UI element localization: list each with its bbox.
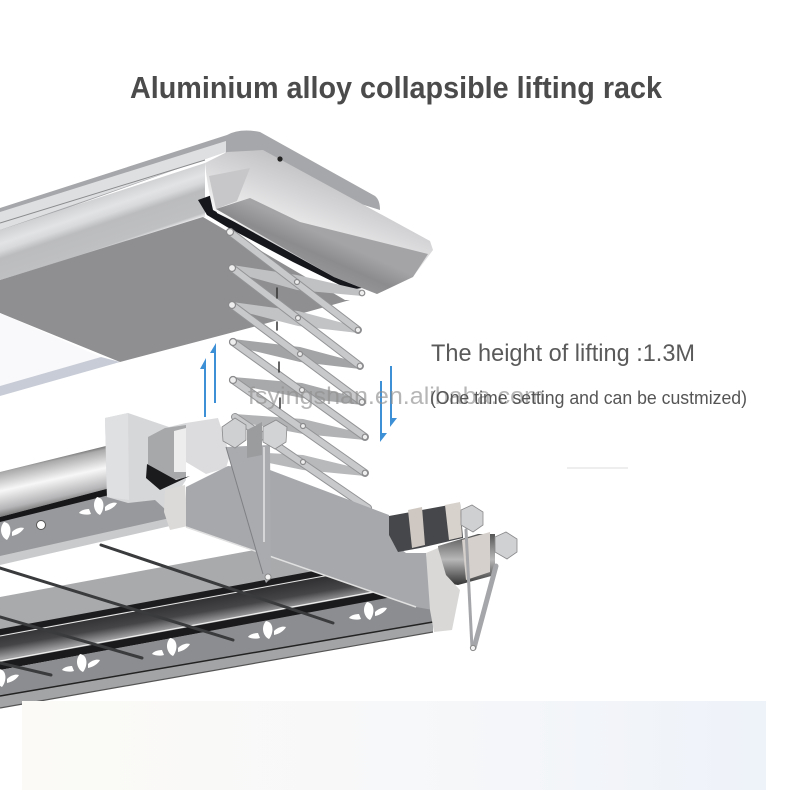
inner cable segments: [277, 288, 280, 408]
cross wires: [0, 545, 333, 675]
rear rail flowers and hole: [79, 497, 117, 515]
steep arms: [230, 232, 368, 508]
front perforated panel: [0, 590, 433, 696]
lower drying rack: [0, 413, 517, 708]
down arrows: [380, 366, 397, 442]
watermark: fsyingshan.en.alibaba.com: [248, 383, 545, 410]
rear dark channel: [0, 476, 170, 524]
collar: [186, 418, 230, 474]
black slot: [198, 195, 362, 290]
right upper tube: [389, 503, 463, 552]
bottom pale band: [22, 701, 766, 790]
scissor lifting arms: [226, 228, 368, 508]
light panel: [0, 313, 101, 386]
end cap: [205, 150, 433, 294]
arm pivots: [226, 228, 368, 476]
cap sensor dot: [277, 156, 283, 162]
upper ceiling unit: [0, 131, 433, 396]
rear perforated rail: [0, 480, 170, 563]
flat arms: [232, 265, 365, 476]
lifting height label: The height of lifting :1.3M: [431, 340, 695, 367]
cap lower face: [216, 198, 428, 294]
plate end foot: [164, 485, 188, 530]
right hex bolts: [461, 505, 483, 532]
main cross plate: [186, 466, 433, 610]
left hex bolts: [222, 418, 246, 448]
right end foot: [426, 548, 460, 632]
mid panel: [0, 523, 400, 631]
dark channel: [0, 557, 400, 664]
grey underside panel: [0, 217, 350, 362]
lifting note: (One time setting and can be custmized): [430, 388, 747, 408]
right V pendant: [466, 530, 496, 651]
up arrows: [200, 343, 216, 417]
front flowers: [349, 602, 387, 620]
right lower tube: [438, 534, 495, 585]
left pendant hook: [226, 445, 271, 583]
left end block: [105, 413, 186, 510]
front rail: [0, 622, 433, 708]
aluminium side strip: [0, 163, 205, 280]
rear tube: [0, 445, 110, 517]
title: Aluminium alloy collapsible lifting rack: [130, 70, 663, 105]
ceiling frame back rim: [0, 131, 380, 232]
